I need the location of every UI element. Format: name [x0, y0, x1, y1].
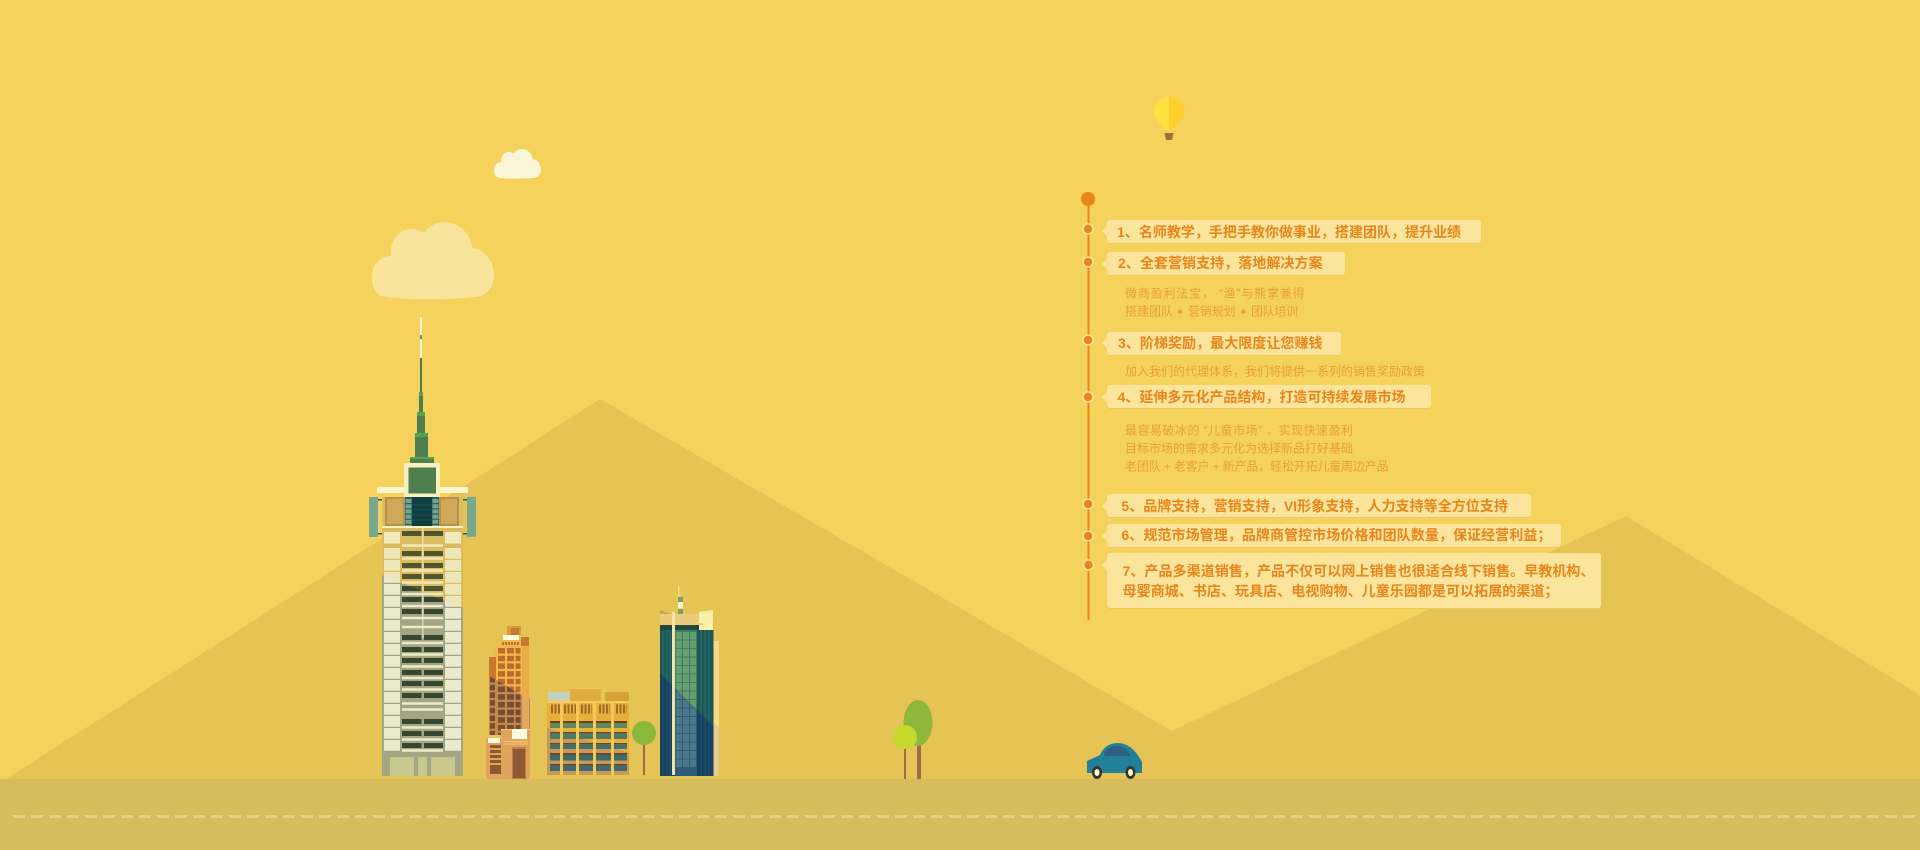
item 4: details: 最容易破冰的 “儿童市场” ，实现快速盈利 [1125, 422, 1353, 438]
item 2: details: 微商盈利法宝， “渔”与熊掌兼得 [1125, 286, 1305, 300]
item 3: heading: 3、阶梯奖励，最大限度让您赚钱 [1118, 335, 1322, 351]
item 7: heading [1102, 553, 1601, 609]
low-rise orange building [547, 688, 629, 775]
item 2: details [1125, 286, 1305, 318]
icon: large cloud [372, 222, 494, 299]
item 3: details: 加入我们的代理体系，我们将提供一系列的销售奖励政策 [1125, 364, 1425, 378]
timeline spine and dots [1081, 192, 1095, 620]
icon: hot air balloon [1154, 97, 1185, 140]
item 2: details: 团队培训 [1251, 304, 1298, 318]
item 2: heading: 2、全套营销支持，落地解决方案 [1118, 255, 1322, 271]
item 1: heading [1102, 220, 1481, 244]
item 6: heading [1102, 524, 1561, 548]
item 4: details: 老团队 + 老客户 + 新产品，轻松开拓儿童周边产品 [1125, 458, 1389, 474]
mountains [6, 399, 1920, 779]
item 2: details: 营销规划 [1188, 304, 1236, 318]
blue glass tower [660, 586, 719, 776]
item 7: heading: 母婴商城、书店、玩具店、电视购物、儿童乐园都是可以拓展的渠道； [1122, 583, 1558, 600]
item 4: details: 目标市场的需求多元化为选择新品打好基础 [1125, 440, 1353, 456]
orange brick tower [486, 626, 530, 779]
item 4: heading [1102, 385, 1431, 409]
item 4: heading: 4、延伸多元化产品结构，打造可持续发展市场 [1118, 389, 1406, 405]
item 2: details: 搭建团队 [1125, 304, 1173, 318]
item 1: heading: 1、名师教学，手把手教你做事业，搭建团队，提升业绩 [1117, 224, 1461, 240]
item 2: details: ● [1241, 306, 1247, 318]
item 5: heading [1102, 494, 1531, 518]
icon: blue car [1087, 743, 1142, 779]
item 3: heading [1102, 332, 1341, 356]
road [0, 779, 1920, 850]
item 4: details [1125, 422, 1389, 474]
tall tower building [369, 317, 476, 776]
item 2: heading [1102, 252, 1345, 276]
icon: two trees [893, 700, 932, 779]
item 7: heading: 7、产品多渠道销售，产品不仅可以网上销售也很适合线下销售。早教机构、 [1122, 563, 1594, 579]
item 6: heading: 6、规范市场管理，品牌商管控市场价格和团队数量，保证经营利益； [1121, 527, 1551, 544]
icon: round tree [632, 721, 656, 775]
item 5: heading: 5、品牌支持，营销支持，VI形象支持，人力支持等全方位支持 [1121, 498, 1508, 514]
item 2: details: ● [1177, 306, 1183, 318]
icon: small cloud [494, 149, 541, 179]
